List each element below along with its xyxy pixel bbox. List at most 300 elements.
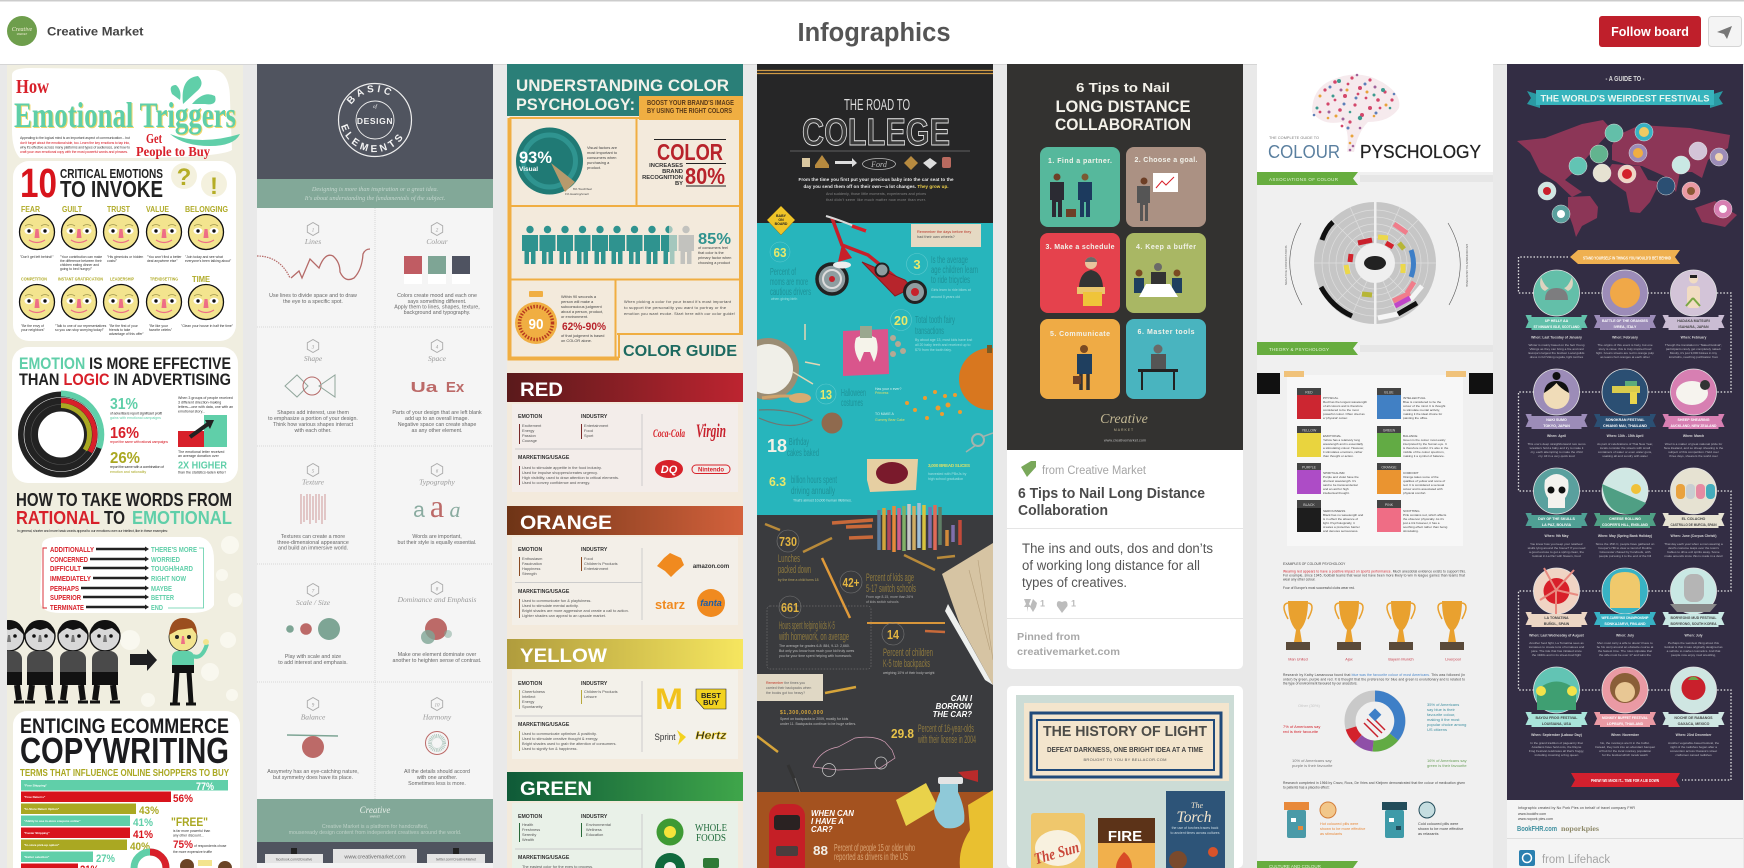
horizontal bar chart: "Ability to use in-store coupons online" [24, 819, 81, 823]
element 3: shape: Shapes add interest, use them [277, 410, 350, 416]
element 4: space: Negative space can create shape [398, 422, 476, 428]
rational words: DIFFICULT [50, 564, 81, 573]
festival descriptions: Frog Festival celebrates all that's froggy, [1529, 749, 1584, 753]
swatch descriptions: intellectual thought. [1323, 491, 1350, 495]
festival descriptions: a vehicle to market cosmetics. And that [1667, 649, 1720, 653]
word How: How [16, 76, 49, 98]
quotes row 2 [21, 324, 234, 336]
study text and arrow chart [178, 396, 233, 458]
section: green details: Environmental [586, 822, 611, 827]
logos [655, 553, 729, 617]
stat 85 percent: 85% [698, 231, 731, 248]
band: green: GREEN [520, 779, 592, 800]
festival names: CASTRILLO DE MURCIA, SPAIN [1670, 523, 1717, 527]
research paragraph: order) by green, purple and red. It is thought that the preference for blue and green is evolutionary and is related to [1283, 678, 1465, 682]
section: red details: High visibility, used to draw attention to critical elements. [522, 475, 619, 480]
orange banner: STAND YOURSELF IN THINGS YOU WOULD'D BET BEHIND [1583, 256, 1672, 260]
festival names: WIFE-CARRYING CHAMPIONSHIP [1602, 616, 1649, 620]
swatch descriptions: the observer physically. As it's [1403, 517, 1444, 521]
rational words: TERMINATE [50, 603, 84, 612]
crayons illustration [832, 503, 960, 552]
red end ribbon [1571, 773, 1680, 787]
chalkboard header [757, 64, 993, 224]
rational words [50, 545, 94, 612]
stat 13 [816, 384, 866, 409]
note card: Remember the days before they [917, 230, 971, 234]
free callout: is far more powerful than [173, 829, 210, 833]
swatch purple: PURPLE [1302, 466, 1317, 470]
stat 661: 661 [781, 600, 799, 615]
element 7: scale: to add interest and emphasis. [278, 660, 348, 666]
band: red [507, 373, 743, 402]
visual factors text: most important to [587, 150, 617, 155]
element 5: texture: Texture [302, 478, 325, 486]
swatch descriptions: EMOTIONAL [1323, 434, 1342, 438]
stat 31 percent: 31% [110, 396, 138, 413]
90 seconds text: subconscious judgment [561, 304, 603, 309]
festival names: ISAHARA, JAPAN [1678, 325, 1709, 329]
element 10: harmony: All the details should accord [404, 769, 470, 775]
orange subhead: BOOST YOUR BRAND'S IMAGE [647, 98, 734, 107]
quotes row 1: everyone's been talking about" [185, 259, 232, 263]
circular badge: DESIGN [357, 116, 393, 126]
stat 85 percent: primary factor when [698, 256, 731, 260]
study text and arrow chart: The emotional letter received [178, 450, 224, 454]
emotion labels row 1 [21, 206, 228, 212]
stat 85 percent [698, 231, 731, 265]
swatch descriptions: Blue is considered to be the [1403, 400, 1441, 404]
festival descriptions: the 1940s and in its street-food fight [1532, 653, 1581, 657]
donut callouts: popular choice among [1427, 722, 1466, 727]
stat backpacks spending: under 11. Backpacks continue to be huge sellers. [780, 722, 856, 726]
arrow [130, 649, 157, 671]
color increases brand recognition stat: COLOR [657, 139, 723, 165]
donut callouts: say blue is their [1427, 707, 1455, 712]
section: yellow details: Intellect [522, 694, 536, 699]
send button with paper plane icon [1708, 16, 1742, 46]
donut callouts: 16% of Americans say [1427, 758, 1467, 763]
heading Emotional Triggers: Emotional Triggers [14, 95, 236, 135]
festival dates: When: July [1616, 634, 1634, 638]
color increases brand recognition stat: BRAND [662, 169, 683, 175]
band: yellow: YELLOW [520, 646, 607, 667]
swatch descriptions: of all colours and is therefore [1323, 404, 1363, 408]
festival descriptions: Vikings as they can bring a fire and raid [1529, 347, 1584, 351]
90 seconds text [561, 294, 606, 343]
heading 6 tips [1055, 80, 1191, 134]
stat 6.3: 6.3 [769, 474, 786, 489]
horizontal bar chart: "In-Store Return Option" [24, 807, 60, 811]
quotes row 2: "Clean your house in half the time" [181, 324, 234, 328]
rational words: PERHAPS [50, 584, 79, 593]
color increases brand recognition stat: 80% [685, 163, 725, 189]
stat 26 percent [110, 450, 164, 474]
swatch descriptions: physical comfort. [1403, 491, 1426, 495]
swatch descriptions: wavelength and is essentially [1323, 442, 1364, 446]
placebo text [1283, 781, 1465, 790]
coins [890, 335, 906, 357]
section: red details: EMOTION [518, 414, 542, 420]
90 seconds text: Within 90 seconds a [561, 294, 597, 299]
logos: M [655, 683, 683, 716]
horizontal bar chart: 41% [133, 829, 153, 841]
section: red details: Used to convey confidence and energy. [522, 480, 590, 485]
swatch descriptions: BALANCE [1403, 434, 1417, 438]
festival descriptions: Winter is mainly based on the fact Young [1529, 343, 1585, 347]
section: orange details [512, 537, 738, 625]
stat 31 percent [110, 396, 162, 420]
section label theory and psychology: THEORY & PSYCHOLOGY [1269, 347, 1329, 352]
section: yellow details: EMOTION [518, 681, 542, 687]
reminder card [757, 674, 823, 701]
heading rational to emotional [17, 493, 232, 524]
element 2: colour: Colour [426, 237, 448, 246]
swatch descriptions: INTELLECTUAL [1403, 396, 1426, 400]
heading critical emotions: TO INVOKE [60, 176, 163, 202]
emotional words: MAYBE [151, 584, 172, 593]
stat 42 [840, 571, 916, 604]
festival descriptions: Acadians have held onto, the Rayne [1532, 745, 1582, 749]
donut callouts: purple is their favourite [1292, 763, 1333, 768]
element 4: space: Space [428, 354, 447, 363]
main ribbon: THE WORLD'S WEIRDEST FESTIVALS [1540, 94, 1710, 104]
heading can i borrow the car [933, 694, 973, 719]
swatch descriptions: light. Psychologically, it [1323, 521, 1355, 525]
birthday candles stat: 18 [767, 436, 787, 456]
pinned from: creativemarket.com [1017, 646, 1120, 658]
pin description: The ins and outs, dos and don’ts [1022, 541, 1213, 556]
section: yellow details [512, 670, 738, 759]
element 3: shape: Shape [304, 354, 323, 363]
stat 3 [906, 254, 978, 299]
festival descriptions: make amends since this is made in a devil [1665, 554, 1723, 558]
stat 20: By about age 13, most kids have lost [915, 338, 972, 342]
emotional words: BETTER [151, 593, 174, 602]
birthday candles stat: Birthday [789, 437, 809, 448]
emotional words: TOUGH/HARD [151, 564, 193, 573]
element 8: dominance: 8 [436, 588, 439, 592]
logos: amazon.com [693, 564, 729, 570]
quotes row 2: friends to take [109, 328, 130, 332]
section: green details: Freshness [522, 827, 540, 832]
element 1: lines: the eye to a specific spot. [283, 299, 343, 305]
stat 88: reported as drivers in the US [834, 852, 908, 863]
wheel labels: ENVIRONMENTAL RESPONSE [1465, 244, 1469, 287]
heading rational to emotional: RATIONAL [16, 507, 100, 528]
quotes row 1: "Join today and see what [185, 255, 223, 259]
intro text: And suddenly, those little moments, experiences and prices [826, 192, 926, 196]
element 6: typography: a [430, 488, 444, 524]
swatch pink [1377, 500, 1401, 532]
color increases brand recognition stat [642, 139, 726, 189]
festival descriptions: night of the radishes began after a [1670, 745, 1717, 749]
the torch box: to ancient times across cultures [1170, 831, 1220, 835]
section: yellow details: Cheerfulness [522, 689, 545, 694]
heading understanding color psychology: UNDERSTANDING COLOR [516, 76, 729, 95]
90 seconds text: or environment. [561, 314, 588, 319]
festival descriptions: as teams hurl oranges at each other [1600, 355, 1650, 359]
element 5: texture: 5 [312, 470, 315, 474]
quotes row 1: the difference between their [60, 259, 103, 263]
question and exclamation icons [171, 163, 227, 200]
red toy car [769, 804, 805, 868]
intro text [20, 136, 130, 154]
quotes row 2: favorite celebs" [149, 328, 173, 332]
festival descriptions: That day each year when a man wearing a [1664, 542, 1723, 546]
donut callouts: red is their favourite [1283, 729, 1319, 734]
the torch box: Torch [1176, 809, 1212, 826]
pinned paper with colour swatches [1257, 371, 1493, 546]
manila folder paper [942, 543, 993, 685]
tip 5: communicate: 5. Communicate [1050, 331, 1110, 338]
circular badge: ELEMENTS [341, 124, 402, 152]
swoosh [170, 134, 240, 146]
festival descriptions: Since the 15th C, people have gathered on [1596, 542, 1655, 546]
warm pills text [1320, 822, 1365, 836]
section: green details: Wellness [586, 827, 602, 832]
stat 2x higher [178, 462, 227, 474]
colour psychology title [1268, 136, 1481, 162]
section: orange details: EMOTION [518, 547, 542, 553]
festival dates: When: June (Corpus Christi) [1671, 534, 1716, 538]
stat 16 percent [110, 427, 168, 444]
avatar: MARKET [17, 33, 28, 36]
header bar [0, 0, 1744, 65]
element 6: typography: Typography [419, 478, 456, 486]
horizontal bar chart: 77% [196, 781, 214, 793]
festival names: DAY OF THE SKULLS [1538, 517, 1575, 521]
section: red details: Excitement [522, 423, 542, 428]
swatch descriptions: Yellow has a relatively long [1323, 438, 1360, 442]
heading Emotional Triggers [14, 102, 236, 136]
swatch descriptions: Red has the longest wavelength [1323, 400, 1367, 404]
panel: history of light card [1007, 686, 1243, 868]
festival descriptions: cry. All in a very quick loud [1538, 454, 1575, 458]
horizontal bar chart: "In-store pick-up option" [24, 843, 60, 847]
orange banner [1570, 250, 1680, 264]
section: yellow details: MARKETING/USAGE [518, 722, 570, 728]
cold pills text: Cold coloured pills were [1418, 822, 1458, 826]
visual factors text: purchasing a [587, 160, 610, 165]
swatch descriptions: SERIOUSNESS [1323, 509, 1345, 513]
heading when can i have a car: WHEN CAN [811, 809, 854, 818]
element 9: balance: Balance [301, 712, 326, 722]
credits: www.bookfhr.com [1518, 812, 1546, 816]
intro sentence: In general, shorter and more basic words appeal to our emotions over our intellect, like in these examples: [17, 529, 168, 533]
section: red details: Passion [522, 433, 536, 438]
source tag icon [1021, 461, 1036, 477]
element 6: typography: 6 [436, 470, 439, 474]
festival descriptions: Another food fight, La Tomatina sees as [1529, 641, 1584, 645]
section: red details: INDUSTRY [581, 414, 608, 420]
visual factors text: product. [587, 165, 601, 170]
heading understanding color psychology: PSYCHOLOGY: [516, 95, 635, 114]
element 5: texture: three-dimensional appearance [277, 540, 349, 546]
warm pills text: shown to be more effective [1320, 827, 1365, 831]
examples text: Four of Europe's most successful clubs wear red. [1283, 586, 1355, 590]
credits [1518, 806, 1635, 821]
reminder card: carried their backpacks when [766, 686, 811, 690]
color increases brand recognition stat: RECOGNITION [642, 175, 683, 181]
section: yellow details: Used to communicate optimism & positivity. [522, 731, 597, 736]
pin title: 6 Tips to Nail Long Distance [1018, 486, 1205, 502]
partner logos: noporkpies [1561, 824, 1599, 833]
festival descriptions: devil's costume leaps over the town's [1668, 546, 1719, 550]
section: orange details: Lighter shades can appeal to an upscale market. [522, 613, 606, 618]
element 9: balance: but symmetry does have its place. [273, 775, 353, 781]
stat 13: 13 [820, 387, 832, 402]
heading when can i have a car: CAR? [811, 825, 833, 834]
heading 6 tips: 6 Tips to Nail [1076, 80, 1170, 95]
swatch black [1297, 500, 1321, 532]
festival descriptions: As part of celebrations of Thai New Year, [1597, 442, 1653, 446]
donut chart [24, 394, 101, 472]
creative market logo [1100, 412, 1148, 442]
pumpkin [959, 345, 1021, 410]
festival names: BORYEONG MUD FESTIVAL [1670, 616, 1717, 620]
teal intro strip [257, 179, 493, 208]
panel: the road to college: with their license in 2004 [918, 734, 976, 746]
heading enticing ecommerce copywriting: ENTICING ECOMMERCE [20, 715, 229, 738]
festival dates: When: Last Wednesday of August [1529, 634, 1585, 638]
element 6: typography: Words are important, [412, 534, 462, 540]
stat 63: Percent of [770, 267, 796, 278]
section: green details: Serenity [522, 832, 536, 837]
panel: 10 critical emotions [13, 160, 236, 341]
festival names: MONKEY BUFFET FESTIVAL [1602, 716, 1649, 720]
donut callouts: making it the most [1427, 717, 1460, 722]
stat 661: But only you know how much your kid truly owes [779, 649, 855, 653]
festival names: IVREA, ITALY [1614, 325, 1637, 329]
festival dates: When: September (Labour Day) [1531, 733, 1582, 737]
festival descriptions: skulls lying around the house? If you need [1528, 546, 1586, 550]
stat 42: of kids switch schools [866, 600, 899, 604]
horizontal bar chart: 40% [130, 841, 150, 853]
halloween note: Princess [875, 391, 889, 395]
logos: Virgin [696, 421, 726, 442]
festival descriptions: New Zealand, and so sheep shearing is the [1664, 446, 1724, 450]
90 seconds text: about a person, product, [561, 309, 603, 314]
free callout: "FREE" [171, 815, 208, 829]
90 seconds text: person will make a [561, 299, 594, 304]
footer: creative market strip [257, 799, 493, 842]
colour psychology title: PYSCHOLOGY [1360, 142, 1481, 162]
festival names: BUÑOL, SPAIN [1544, 621, 1570, 626]
pin title: Collaboration [1018, 503, 1108, 519]
swatch descriptions: to stimulate mental activity, [1403, 408, 1440, 412]
study text and arrow chart: 3 different direction-making [178, 400, 221, 404]
quotes row 2: your neighbors" [21, 328, 45, 332]
visual factors text: 1% Hearing/smell [565, 192, 589, 196]
festival descriptions: Though the translation is "Naked festival", [1665, 343, 1722, 347]
dotted route [1518, 257, 1731, 780]
stat 20: 20 [894, 313, 908, 328]
festival descriptions: loincloths, reaching purification from [1669, 355, 1719, 359]
heading 6 tips: LONG DISTANCE [1056, 97, 1190, 116]
stat 730: packed down [778, 564, 811, 576]
stat 13: Halloween [841, 388, 866, 399]
quotes row 2: so you can stop worrying today!" [55, 328, 105, 332]
quotes row 1: "His gimmicks or hidden [107, 255, 143, 259]
number 10: 10 [20, 160, 57, 206]
festival names: CHEESE ROLLING [1609, 517, 1641, 521]
footer: creative market strip: Creative [360, 805, 390, 815]
stat 3: to ride tricycles [931, 275, 970, 286]
quotes row 1: deal anywhere else" [147, 259, 178, 263]
stopwatch icon [515, 291, 557, 344]
pin description: types of creatives. [1022, 575, 1127, 590]
swatch orange: ORANGE [1381, 466, 1397, 470]
background stars [120, 536, 242, 707]
stat 6.3: That's almost 10,000 human lifetimes. [793, 498, 852, 502]
stat 85 percent: choosing a product [698, 261, 731, 265]
festival names: ST NINIAN'S ISLE, SCOTLAND [1534, 325, 1580, 329]
stat 730: by the time a child turns 18 [778, 578, 819, 582]
element 6: typography: but their style is equally essential. [398, 540, 476, 546]
panel: colour psychology [1257, 64, 1493, 868]
element 7: scale: Scale / Size [296, 598, 331, 607]
festival names [1534, 319, 1717, 726]
swatch descriptions: colour and is associated with [1403, 487, 1443, 491]
intro text: day you send them off on their own—a lot changes. They grow up. [804, 184, 948, 189]
section: green details: Health [522, 822, 533, 827]
picking color text [624, 299, 735, 316]
halloween note: Gummy Bear Cake [875, 418, 905, 422]
stat bread slices: harvested with PBnJs by [928, 472, 967, 476]
stat 14: weighing 10% of their body weight [883, 671, 935, 675]
element 2: colour: Apply them to lines, shapes, texture, [394, 304, 480, 310]
festival name ribbons [1526, 315, 1724, 727]
festival names: BAYOU FROG FESTIVAL [1536, 716, 1578, 720]
heading emotion vs logic [19, 358, 230, 385]
footer: creative market strip: mouseready design content from independent creatives around the world. [289, 830, 461, 836]
swatch green: GREEN [1383, 428, 1396, 432]
stat 2x higher: 2X HIGHER [178, 460, 227, 472]
festival names: CHIANG MAI, THAILAND [1603, 424, 1647, 428]
band: yellow [507, 639, 743, 669]
jam toast [867, 459, 918, 492]
colour psychology title: THE COMPLETE GUIDE TO [1269, 136, 1319, 140]
festival descriptions: soaking all and sundry with water [1602, 454, 1648, 458]
element 5: texture: and build an immersive world. [278, 546, 348, 552]
pin and like counts: 1 [1071, 598, 1076, 608]
element 8: dominance [393, 582, 481, 664]
tip 2: choose a goal [1126, 147, 1206, 227]
element 6: typography: a [413, 499, 425, 522]
trophy labels: Man United [1288, 658, 1308, 662]
panel: understanding color psychology [507, 64, 743, 868]
festival names: LA TOMATINA [1544, 616, 1569, 620]
section: yellow details: INDUSTRY [581, 681, 608, 687]
tip 4: keep a buffer: 4. Keep a buffer [1136, 244, 1196, 251]
festival descriptions: tomatoes to create tons of tomatoes and [1529, 645, 1584, 649]
section: green details: MARKETING/USAGE [518, 855, 570, 861]
tricycle illustration [817, 216, 926, 302]
board owner name: Creative Market [47, 24, 144, 38]
festival names: SONKAJARVI, FINLAND [1604, 622, 1646, 626]
heading 6 tips: COLLABORATION [1055, 115, 1191, 134]
chalk car sketch [813, 737, 895, 776]
note card: had their own wheels? [917, 235, 955, 239]
tip 6: master tools [1126, 319, 1206, 399]
intro text: don't forget about the emotional side, too. Learn the key emotions to tap into, [20, 141, 130, 145]
stat 730: 730 [779, 534, 797, 549]
festival descriptions: subject of this competition. Held over [1668, 450, 1719, 454]
stat 26 percent: 26% [110, 450, 140, 467]
swatch descriptions: painting the office. [1403, 416, 1428, 420]
horizontal bar chart: 27% [96, 853, 115, 865]
swatch green [1377, 426, 1401, 457]
